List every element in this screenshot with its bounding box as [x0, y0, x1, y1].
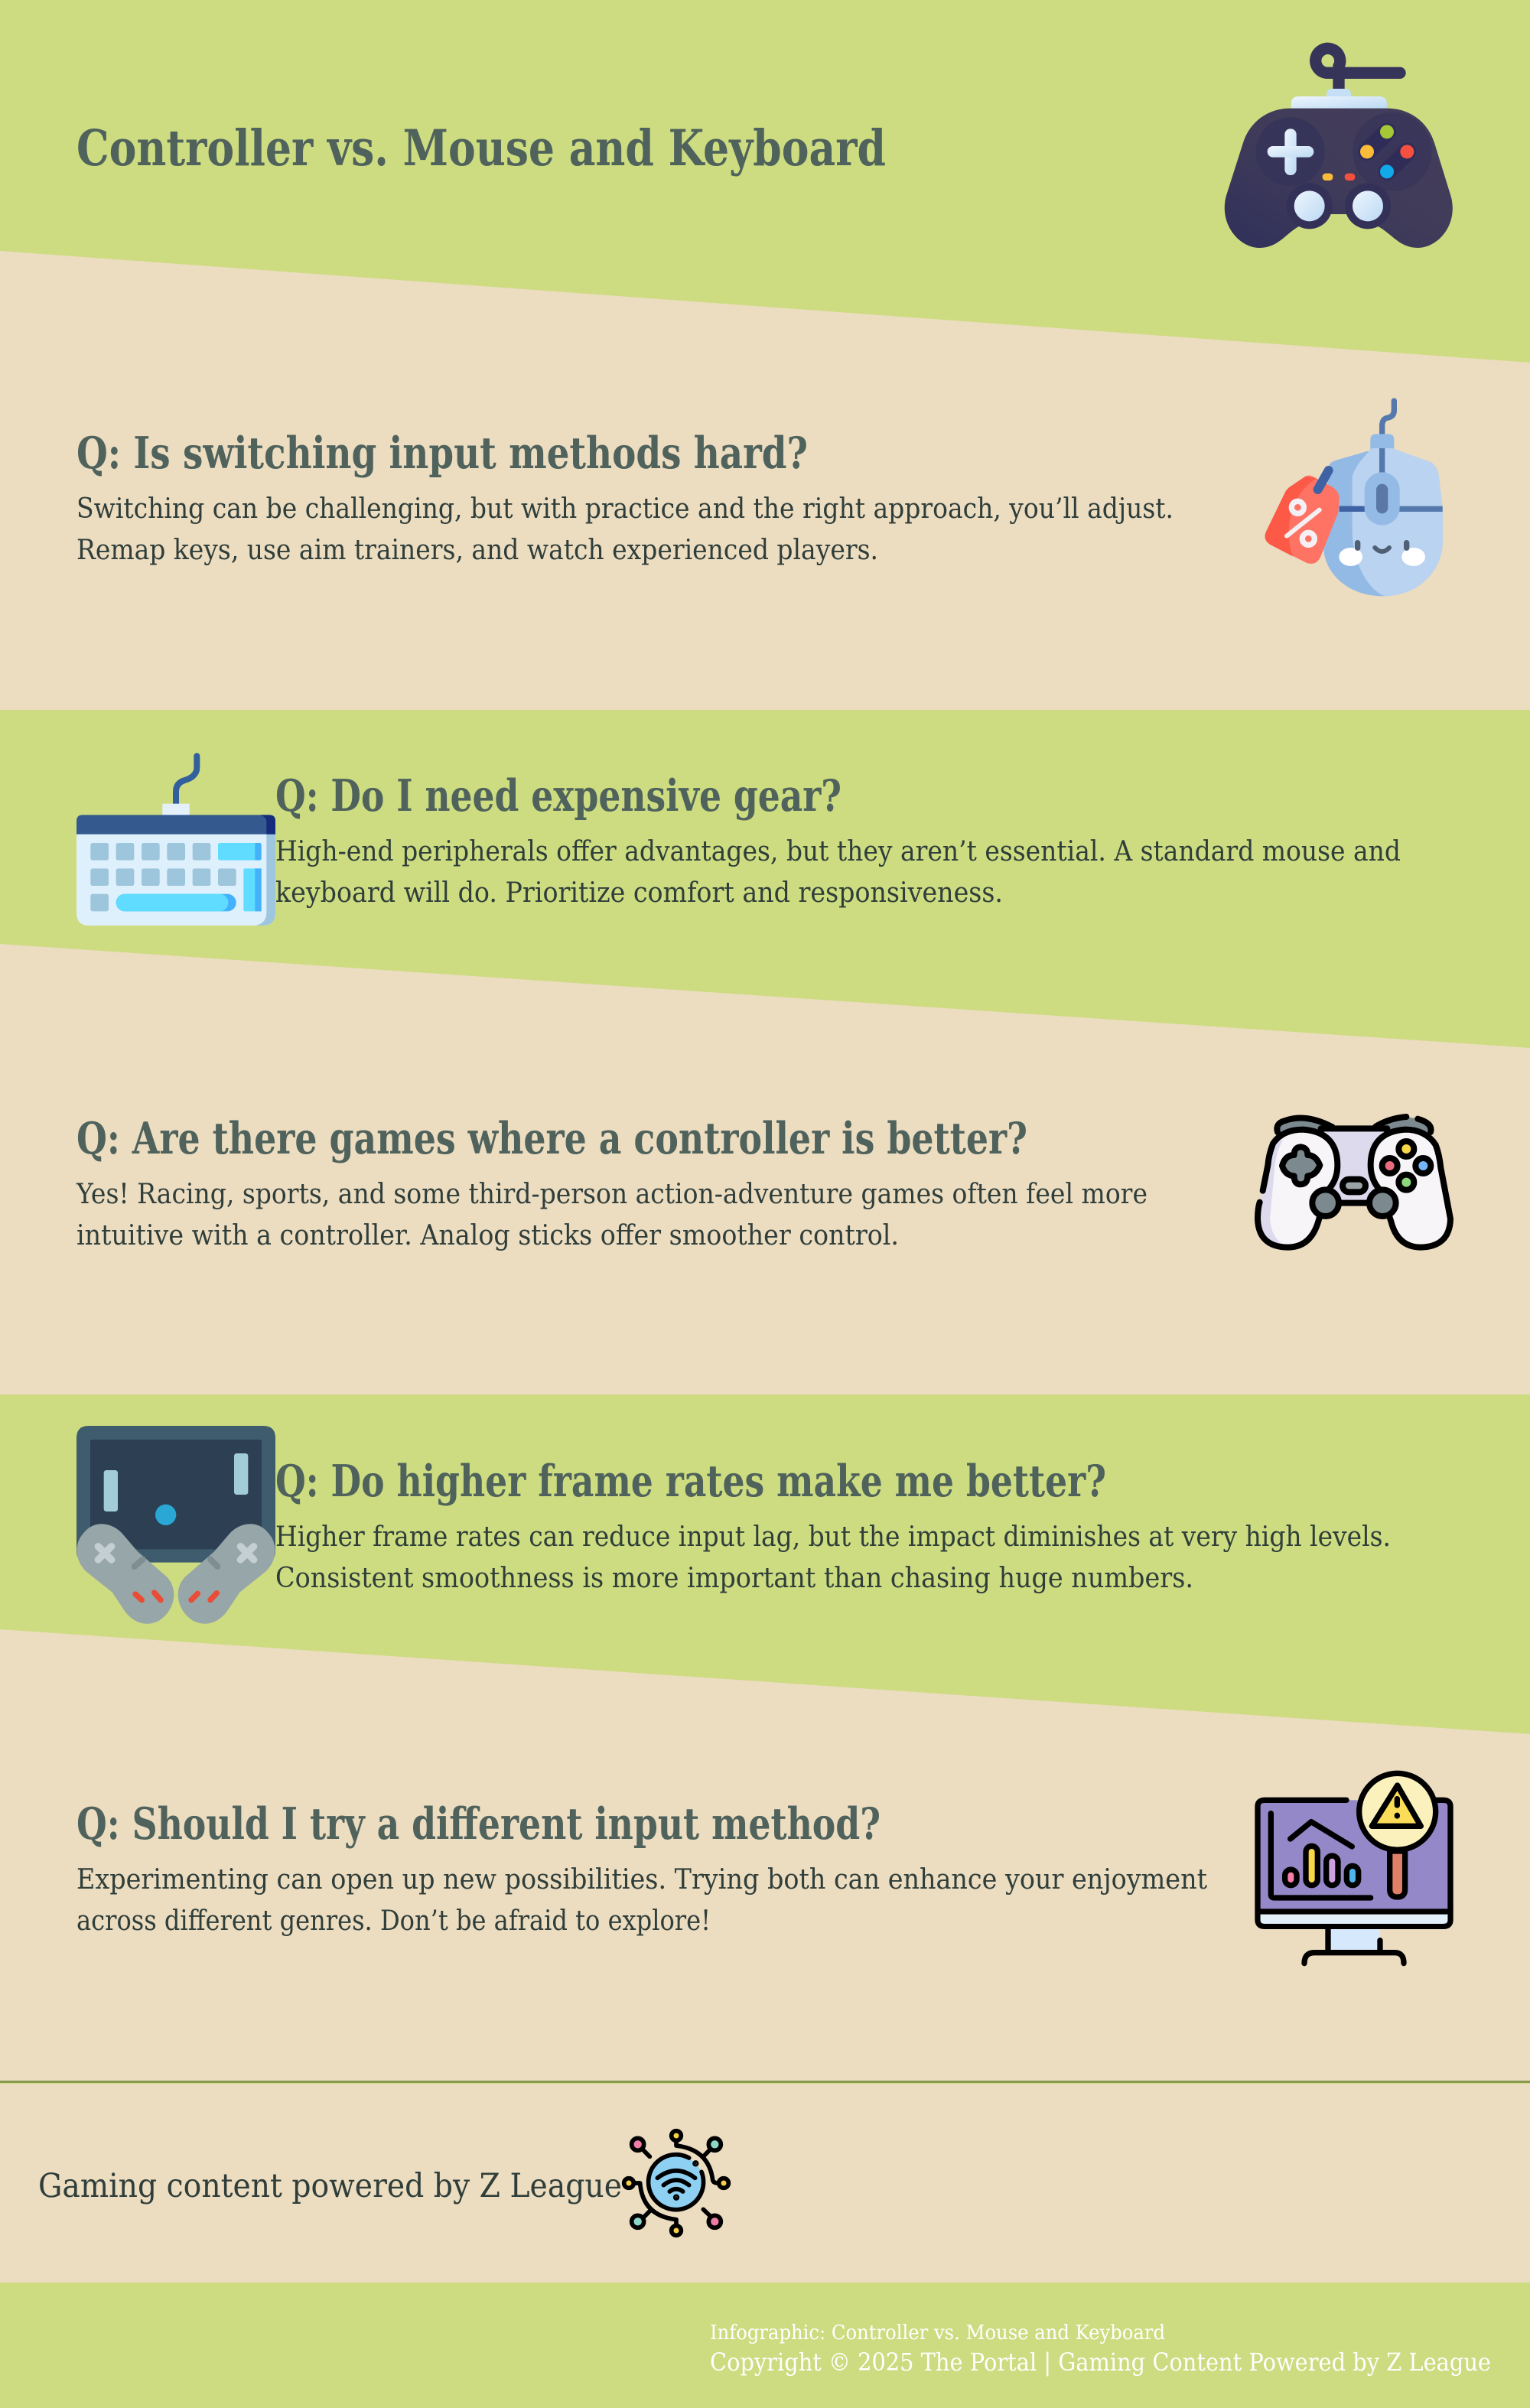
- panel: question 4: [275, 1456, 1391, 1594]
- footer note: Gaming content powered by Z League: [38, 2167, 622, 2205]
- icon: monitor with warning magnifier: [1258, 1773, 1450, 1964]
- text: answer 3: intuitive with a controller. Analog sticks offer smoother control.: [76, 1220, 899, 1251]
- text: answer 5: [76, 1864, 1207, 1937]
- text: answer 1: [76, 493, 1174, 566]
- panel: question 5: [76, 1798, 1207, 1937]
- heading: question 1: Q: Is switching input methods hard?: [76, 428, 808, 479]
- icon: keyboard: [76, 756, 275, 926]
- footer: infographic title: Infographic: Controller vs. Mouse and Keyboard: [710, 2322, 1165, 2345]
- panel: question 4 band: [0, 1394, 1530, 1734]
- text: answer 4: [275, 1521, 1391, 1594]
- icon: dark gamepad: [1225, 48, 1453, 248]
- icon: retro game screen with controllers: [76, 1426, 275, 1624]
- icon: wifi network: [624, 2131, 728, 2235]
- panel: question 2: [275, 770, 1401, 909]
- text: answer 2: High-end peripherals offer advantages, but they aren’t essential. A standard mouse and: [275, 836, 1401, 867]
- panel: question 1: [76, 428, 1174, 566]
- text: answer 5: Experimenting can open up new possibilities. Trying both can enhance your enjoyment: [76, 1864, 1207, 1895]
- panel: question 3: [76, 1113, 1148, 1251]
- text: answer 5: across different genres. Don’t be afraid to explore!: [76, 1905, 711, 1937]
- divider: [0, 2081, 1530, 2084]
- text: answer 1: Remap keys, use aim trainers, and watch experienced players.: [76, 535, 878, 566]
- text: answer 3: [76, 1179, 1148, 1251]
- heading: question 4: Q: Do higher frame rates make me better?: [275, 1456, 1106, 1507]
- panel: footer band: [0, 2283, 1530, 2408]
- text: answer 4: Consistent smoothness is more important than chasing huge numbers.: [275, 1563, 1193, 1594]
- heading: question 5: Q: Should I try a different input method?: [76, 1798, 881, 1850]
- panel: question 2 band: [0, 710, 1530, 1048]
- title: Controller vs. Mouse and Keyboard: [76, 119, 886, 177]
- text: answer 1: Switching can be challenging, but with practice and the right approach, you’ll adjust.: [76, 493, 1174, 525]
- heading: question 3: Q: Are there games where a controller is better?: [76, 1113, 1027, 1164]
- panel: header band: [0, 0, 1530, 363]
- heading: question 2: Q: Do I need expensive gear?: [275, 770, 842, 822]
- text: answer 2: keyboard will do. Prioritize comfort and responsiveness.: [275, 877, 1003, 909]
- icon: outlined gamepad: [1258, 1117, 1450, 1248]
- text: answer 2: [275, 836, 1401, 909]
- icon: mouse with price tag: [1265, 401, 1443, 596]
- text: answer 4: Higher frame rates can reduce input lag, but the impact diminishes at very high levels.: [275, 1521, 1391, 1553]
- text: answer 3: Yes! Racing, sports, and some third-person action-adventure games often feel more: [76, 1179, 1148, 1210]
